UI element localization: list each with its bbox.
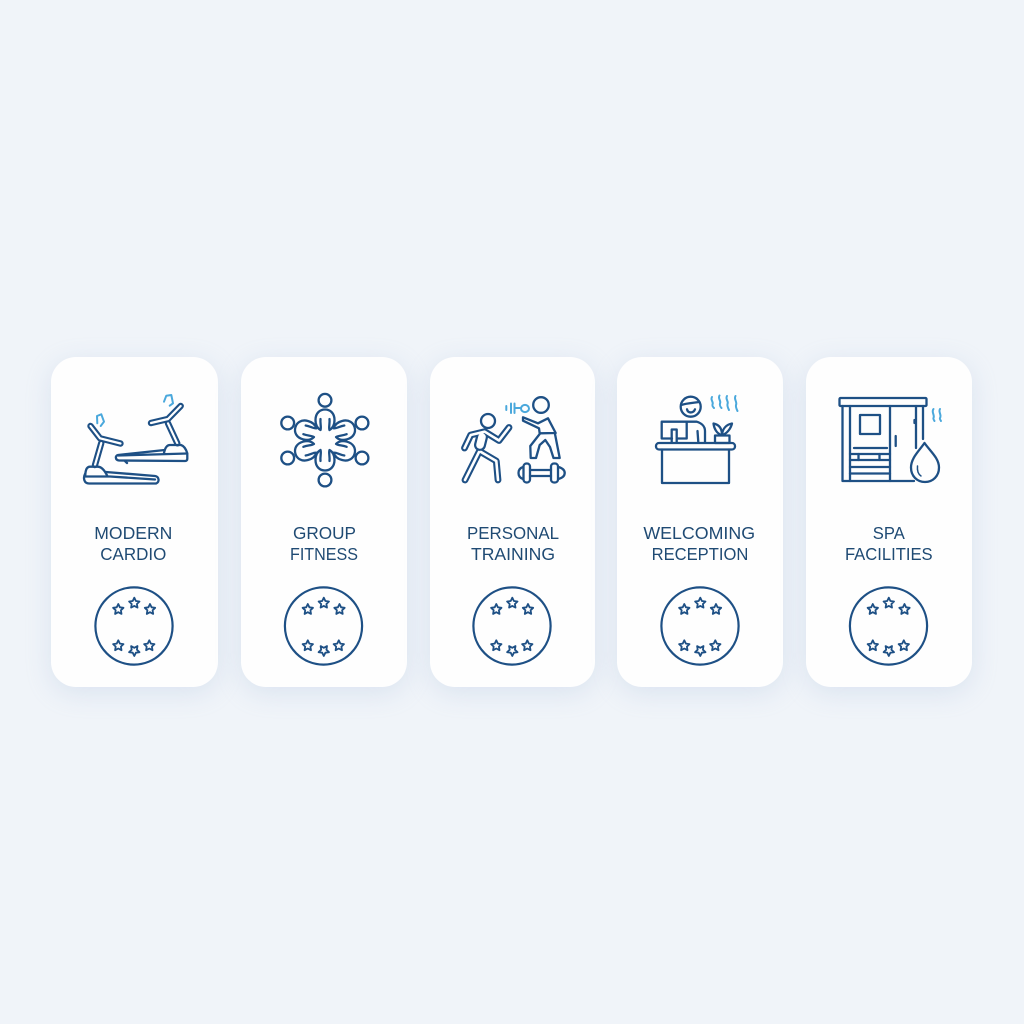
label: group fitness: GROUP: [293, 523, 356, 543]
label: welcoming reception: WELCOMING: [643, 523, 755, 543]
label: welcoming reception: [643, 523, 755, 564]
label: spa facilities: SPA: [873, 523, 905, 543]
label: group fitness: FITNESS: [290, 544, 358, 564]
panel: spa facilities: [806, 357, 972, 687]
badge: six stars: [473, 587, 551, 665]
label: group fitness: [290, 523, 358, 564]
label: personal training: PERSONAL: [467, 523, 559, 543]
panel: personal training: [430, 357, 595, 687]
label: spa facilities: FACILITIES: [845, 544, 933, 564]
badge: six stars: [285, 587, 362, 665]
label: welcoming reception: RECEPTION: [652, 544, 748, 564]
badge: six stars: [850, 587, 927, 665]
label: personal training: TRAINING: [471, 544, 555, 564]
label: modern cardio: CARDIO: [100, 544, 166, 564]
label: modern cardio: [94, 523, 172, 564]
icon: reception desk: [656, 396, 738, 483]
label: spa facilities: [845, 523, 933, 564]
panel: modern cardio: [51, 357, 218, 687]
icon: sauna and water drop: [840, 398, 941, 482]
label: modern cardio: MODERN: [94, 523, 172, 543]
label: personal training: [467, 523, 559, 564]
icon: group circle: [281, 394, 368, 486]
icon: treadmills: [84, 395, 187, 484]
badge: six stars: [95, 587, 173, 665]
panel: welcoming reception: [617, 357, 783, 687]
icon: trainer and client: [464, 397, 565, 482]
panel: group fitness: [241, 357, 407, 687]
badge: six stars: [661, 587, 739, 665]
